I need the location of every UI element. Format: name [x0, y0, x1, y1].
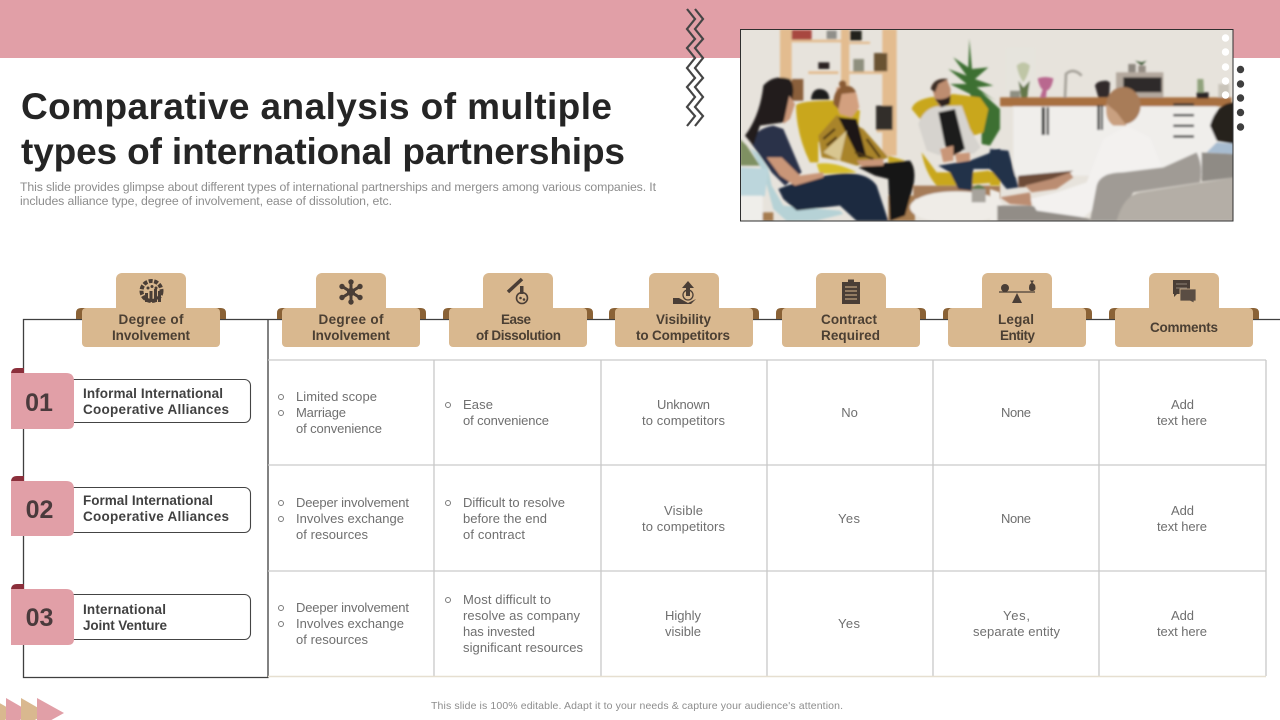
- row 02 label: 02: [26, 496, 53, 524]
- row 01 label: 01: [25, 389, 53, 417]
- column: comments cells: [1157, 397, 1207, 639]
- decorative dots: [1222, 34, 1244, 131]
- icon: chat bubbles: [1173, 280, 1196, 303]
- photo frame: [740, 30, 1233, 221]
- floor: [888, 196, 915, 221]
- column: comments cells: Add: [1171, 397, 1194, 412]
- top pink banner: [0, 0, 1280, 58]
- column: degree of involvement cells: [278, 389, 409, 647]
- photo: team meeting in a living room: [740, 29, 1235, 223]
- column: ease of dissolution cells: of contract: [463, 527, 525, 542]
- column: visibility cells: Visible: [664, 503, 703, 518]
- chair 2: [912, 94, 988, 136]
- column: ease of dissolution cells: of convenience: [463, 413, 549, 428]
- header: visibility to competitors: to Competitors: [636, 328, 730, 343]
- column: comments cells: text here: [1157, 413, 1207, 428]
- header: contract required: Required: [821, 328, 880, 343]
- header: legal entity: [943, 273, 1092, 347]
- column: degree of involvement cells: Limited scope: [296, 389, 377, 404]
- header: comments: Comments: [1150, 320, 1218, 335]
- header: ease of dissolution: of Dissolution: [476, 328, 561, 343]
- column: contract required cells: [838, 405, 860, 631]
- title: types of international partnerships: [21, 131, 625, 172]
- column: visibility cells: to competitors: [642, 519, 726, 534]
- column: ease of dissolution cells: resolve as company: [463, 608, 580, 623]
- row 01 label: [11, 368, 250, 429]
- column: ease of dissolution cells: before the end: [463, 511, 547, 526]
- column: ease of dissolution cells: has invested: [463, 624, 535, 639]
- icon: clipboard: [842, 280, 860, 304]
- comparison table grid: [268, 360, 1266, 676]
- column: degree of involvement cells: Involves exchange: [296, 511, 404, 526]
- column: visibility cells: visible: [665, 624, 701, 639]
- icon: gear with people: [142, 281, 162, 302]
- column: degree of involvement cells: Involves exchange: [296, 616, 404, 631]
- icon: test tube and flask: [508, 279, 528, 304]
- subtitle description: This slide provides glimpse about different types of international partnerships and mergers among various companies. It: [20, 180, 657, 194]
- header: degree of involvement: [277, 273, 426, 347]
- title: Comparative analysis of multiple: [21, 86, 612, 127]
- corner triangles: [0, 698, 64, 720]
- header: degree of involvement (left panel): Degree of: [118, 312, 184, 327]
- row 02 label: Cooperative Alliances: [83, 509, 229, 524]
- column: degree of involvement cells: of resources: [296, 527, 368, 542]
- column: comments cells: text here: [1157, 624, 1207, 639]
- header: contract required: [776, 273, 926, 347]
- footer note: This slide is 100% editable. Adapt it to your needs & capture your audience's attention.: [431, 700, 843, 712]
- column: ease of dissolution cells: Ease: [463, 397, 493, 412]
- column: legal entity cells: None: [1001, 405, 1031, 420]
- column: degree of involvement cells: of resources: [296, 632, 368, 647]
- woman 1: [778, 173, 888, 221]
- icon: hand with up arrow: [673, 281, 696, 304]
- yellow chair 1: [796, 101, 860, 162]
- header: contract required: Contract: [821, 312, 878, 327]
- left half of the photo: [740, 29, 1003, 223]
- header: degree of involvement: Involvement: [312, 328, 390, 343]
- decorative zigzag: [687, 9, 703, 126]
- header: degree of involvement: Degree of: [318, 312, 384, 327]
- column: visibility cells: Highly: [665, 608, 702, 623]
- column: ease of dissolution cells: significant resources: [463, 640, 584, 655]
- subtitle description: [20, 180, 657, 208]
- row 02 label: [11, 476, 250, 536]
- row 02 label: Formal International: [83, 493, 213, 508]
- header: legal entity: Entity: [1000, 328, 1035, 343]
- right half of the photo: [990, 47, 1235, 221]
- header: visibility to competitors: Visibility: [656, 312, 711, 327]
- column: degree of involvement cells: Deeper involvement: [296, 600, 409, 615]
- row 01 label: Informal International: [83, 386, 223, 401]
- woman 2: [858, 161, 914, 221]
- row 03 label: [11, 584, 250, 645]
- column: ease of dissolution cells: Most difficult to: [463, 592, 551, 607]
- woman on right: [1207, 142, 1235, 154]
- pale chair: [750, 147, 843, 221]
- column: visibility cells: [642, 397, 726, 639]
- header: legal entity: Legal: [998, 312, 1034, 327]
- column: degree of involvement cells: Marriage: [296, 405, 346, 420]
- header: comments: [1109, 273, 1259, 347]
- icon: network snowflake: [339, 279, 363, 305]
- column: contract required cells: No: [841, 405, 858, 420]
- icon: balance scale: [999, 280, 1036, 303]
- row 01 label: Cooperative Alliances: [83, 402, 229, 417]
- column: contract required cells: Yes: [838, 511, 860, 526]
- column: legal entity cells: Yes,: [1003, 608, 1030, 623]
- table: [908, 190, 992, 220]
- header: visibility to competitors: [609, 273, 759, 347]
- header: degree of involvement (left panel): Involvement: [112, 328, 190, 343]
- column: comments cells: Add: [1171, 608, 1194, 623]
- floor: [1018, 171, 1073, 187]
- row 03 label: Joint Venture: [83, 618, 167, 633]
- row 03 label: International: [83, 602, 166, 617]
- column: legal entity cells: None: [1001, 511, 1031, 526]
- column: ease of dissolution cells: [446, 397, 584, 655]
- column: comments cells: text here: [1157, 519, 1207, 534]
- title: [21, 86, 625, 172]
- column: comments cells: Add: [1171, 503, 1194, 518]
- sofa: [997, 206, 1090, 221]
- subtitle description: includes alliance type, degree of involvement, ease of dissolution, etc.: [20, 194, 392, 208]
- column: contract required cells: Yes: [838, 616, 860, 631]
- plant: [948, 39, 1000, 146]
- column: visibility cells: to competitors: [642, 413, 726, 428]
- column: legal entity cells: separate entity: [973, 624, 1060, 639]
- column: ease of dissolution cells: Difficult to resolve: [463, 495, 565, 510]
- column: degree of involvement cells: Deeper involvement: [296, 495, 409, 510]
- column: visibility cells: Unknown: [657, 397, 710, 412]
- row 03 label: 03: [26, 604, 53, 632]
- header: ease of dissolution: [443, 273, 593, 347]
- man on sofa: [1030, 175, 1104, 218]
- header: ease of dissolution: Ease: [501, 312, 531, 327]
- column: legal entity cells: [973, 405, 1060, 639]
- man in chair: [918, 106, 981, 156]
- header: degree of involvement (left panel): [76, 273, 226, 347]
- left panel outline: [24, 320, 1280, 678]
- column: degree of involvement cells: of convenience: [296, 421, 382, 436]
